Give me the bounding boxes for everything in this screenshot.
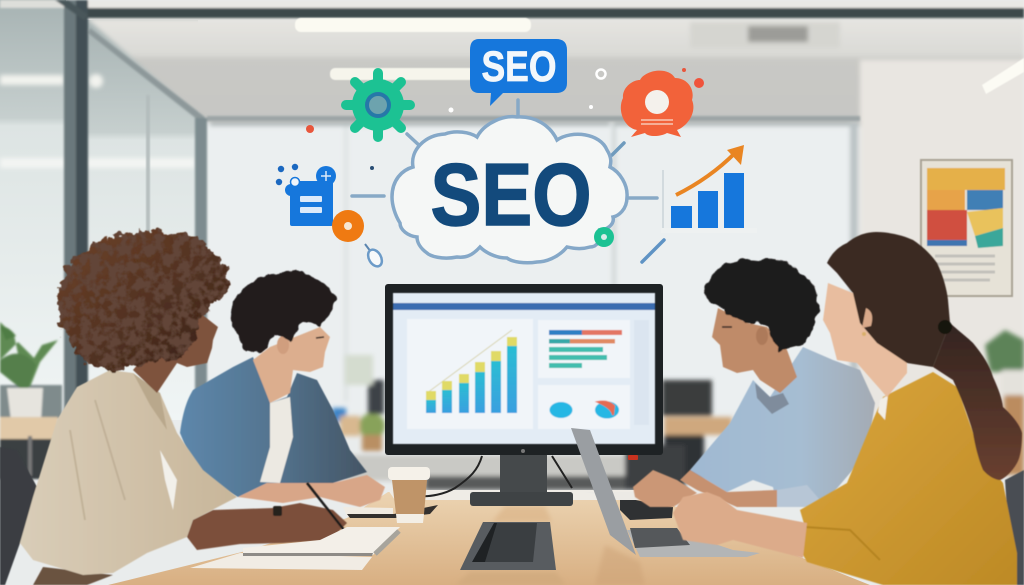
icon: orange badge: [621, 71, 693, 137]
cloud SEO wordmark: SEO: [430, 145, 592, 244]
central cloud: [392, 117, 627, 263]
tablet: [460, 522, 556, 570]
dashboard screen: [393, 293, 655, 444]
person: light blue shirt: [633, 259, 875, 507]
dashboard pie charts: [550, 402, 619, 418]
icon: mouse pointer: [365, 244, 385, 269]
wall poster: [921, 160, 1012, 296]
ceiling lights: [295, 18, 531, 32]
person: denim jacket: [180, 272, 385, 507]
icon: growth bar chart: [661, 145, 757, 233]
icon: SEO speech bubble: SEO: [482, 43, 556, 91]
icon: green gear: [346, 73, 410, 137]
coffee cup: [388, 467, 430, 523]
person: far left with curly hair: [0, 231, 348, 585]
icon: orange target: [332, 210, 364, 242]
SEO illustration: [276, 39, 757, 269]
office chair: [0, 447, 37, 585]
laptop: person four's laptop: [571, 428, 760, 557]
connector lines: [352, 100, 664, 262]
meeting table: [108, 490, 870, 585]
person: right with mustard blouse: [673, 232, 1024, 585]
glass frame: [0, 0, 1024, 420]
notebooks and paper: [190, 505, 438, 570]
dashboard horizontal bars: [549, 330, 622, 368]
icon: blue document: [276, 164, 336, 226]
decorative dots: [306, 68, 704, 170]
laptop: person three's keyboard: [585, 492, 673, 520]
dashboard stacked bar chart: [426, 330, 517, 413]
background plants and desks: [0, 322, 1024, 490]
icon: SEO speech bubble: [470, 39, 567, 106]
monitor: [385, 284, 663, 506]
office chair right: [1005, 470, 1024, 585]
icon: green dot: [594, 227, 614, 247]
